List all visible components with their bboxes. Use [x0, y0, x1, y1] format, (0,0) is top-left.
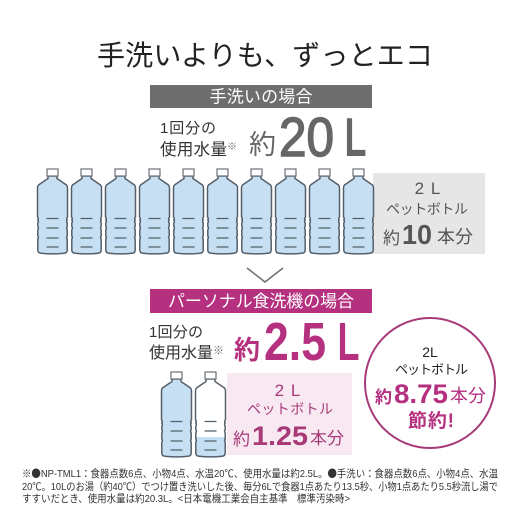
value: about 20 L: 約 — [249, 130, 276, 160]
heading: personal dishwasher — [150, 289, 372, 313]
value: about 2.5 L — [234, 312, 360, 372]
label: water use per wash: 1回分の — [149, 324, 203, 341]
heading: hand washing — [150, 85, 372, 108]
value: about 20 L: 20 — [279, 106, 334, 168]
callout panel: 10 bottles: 約 — [383, 229, 400, 248]
title: 手洗いよりも、ずっとエコ — [97, 40, 433, 71]
callout panel: 10 bottles: 2 L — [415, 179, 441, 198]
callout panel: 1.25 bottles: 2 L — [275, 381, 301, 400]
callout panel: 10 bottles — [373, 173, 485, 254]
callout: savings circle — [365, 318, 495, 448]
callout panel: 1.25 bottles — [227, 373, 352, 455]
footnote: ※●NP-TML1：食器点数6点、小物4点、水温20℃、使用水量は約2.5L。●手洗い：食器点数6点、小物4点、水温 — [22, 466, 498, 481]
icon: quarter-filled bottle — [196, 372, 226, 457]
value: about 2.5 L: 2.5 — [264, 312, 326, 372]
callout: savings circle: 2L — [422, 344, 438, 360]
callout: savings circle: 約 — [375, 388, 392, 407]
callout panel: 10 bottles: ペットボトル — [386, 201, 468, 217]
label: water use per wash: ※ — [227, 142, 237, 153]
label: water use per wash: ※ — [213, 345, 224, 357]
value: about 2.5 L: L — [338, 312, 360, 372]
callout panel: 10 bottles: 本分 — [437, 227, 473, 247]
label: water use per wash: 1回分の — [160, 120, 216, 137]
callout: savings circle: 節約! — [408, 410, 454, 432]
callout: savings circle: 本分 — [450, 386, 486, 406]
value: about 20 L: L — [344, 106, 366, 168]
heading: personal dishwasher: パーソナル食洗機の場合 — [168, 292, 354, 311]
callout panel: 1.25 bottles: 本分 — [310, 429, 344, 448]
heading: hand washing: 手洗いの場合 — [210, 88, 312, 106]
label: water use per wash: 使用水量 — [160, 140, 227, 159]
icon row: ten full bottles — [38, 169, 374, 254]
panel: personal dishwasher — [149, 289, 372, 457]
callout panel: 1.25 bottles: ペットボトル — [247, 401, 333, 417]
label: water use per wash: 使用水量 — [149, 344, 213, 362]
value: about 2.5 L: 約 — [234, 335, 260, 365]
panel: hand washing — [38, 85, 485, 254]
callout: savings circle: 8.75 — [394, 379, 448, 409]
footnote — [22, 466, 498, 505]
callout panel: 1.25 bottles: 1.25 — [252, 421, 308, 451]
icon: full bottle — [162, 372, 192, 457]
footnote: すすいだとき、使用水量は約20.3L。<日本電機工業会自主基準 標準汚染時> — [22, 492, 350, 505]
callout: savings circle: ペットボトル — [395, 362, 468, 377]
callout panel: 10 bottles: 10 — [402, 219, 432, 250]
value: about 20 L — [249, 106, 366, 168]
arrow: chevron down — [247, 268, 283, 282]
callout panel: 1.25 bottles: 約 — [233, 430, 250, 449]
